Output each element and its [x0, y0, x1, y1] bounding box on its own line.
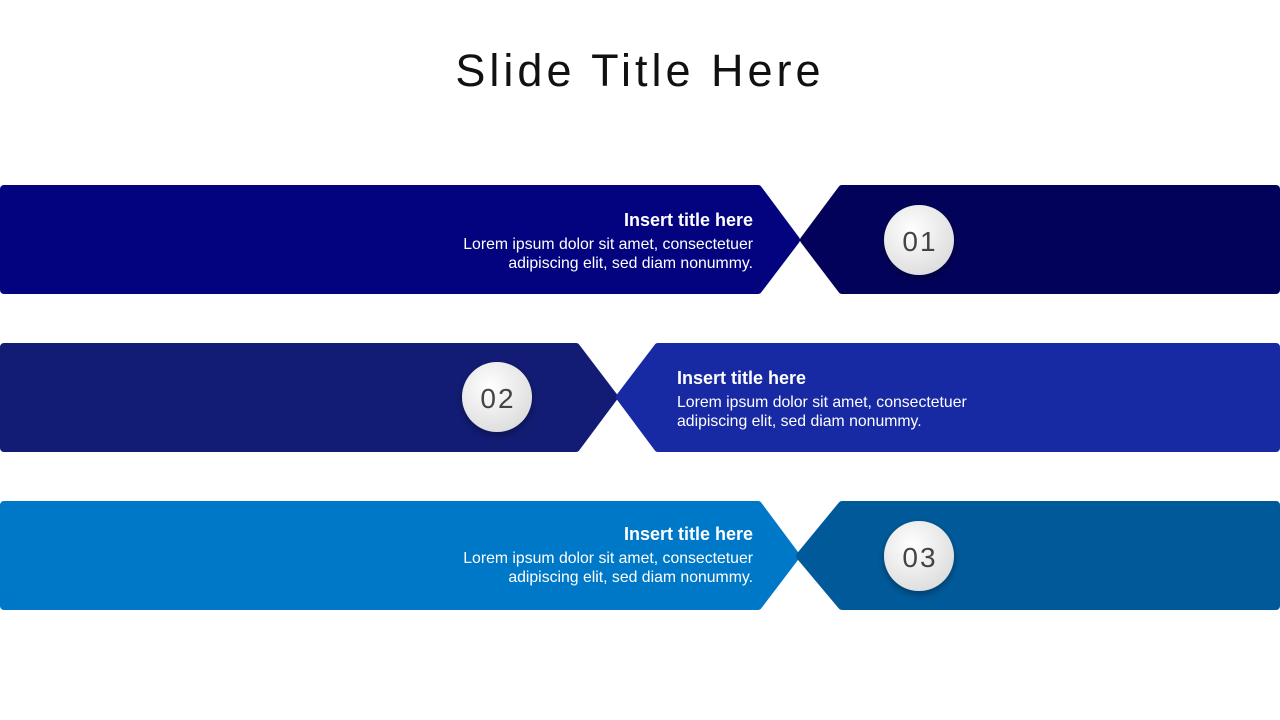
band 1 [4, 189, 1276, 290]
text 2: Insert title here [677, 368, 806, 388]
text 2 [677, 368, 967, 430]
band 2 [4, 347, 1276, 448]
number circles: 01 [902, 226, 938, 257]
text 2: adipiscing elit, sed diam nonummy. [677, 413, 922, 430]
title: Slide Title Here [455, 45, 825, 96]
text 3: adipiscing elit, sed diam nonummy. [508, 569, 753, 586]
text 1 [463, 210, 753, 272]
text 1: adipiscing elit, sed diam nonummy. [508, 255, 753, 272]
band 3 [4, 505, 1276, 606]
text 3: Insert title here [624, 524, 753, 544]
text 2: Lorem ipsum dolor sit amet, consectetuer [677, 394, 967, 411]
text 1: Insert title here [624, 210, 753, 230]
number circles [462, 205, 954, 591]
text 3 [463, 524, 753, 586]
number circles: 03 [902, 542, 938, 573]
text 1: Lorem ipsum dolor sit amet, consectetuer [463, 236, 753, 253]
text 3: Lorem ipsum dolor sit amet, consectetuer [463, 550, 753, 567]
number circles: 02 [480, 383, 516, 414]
